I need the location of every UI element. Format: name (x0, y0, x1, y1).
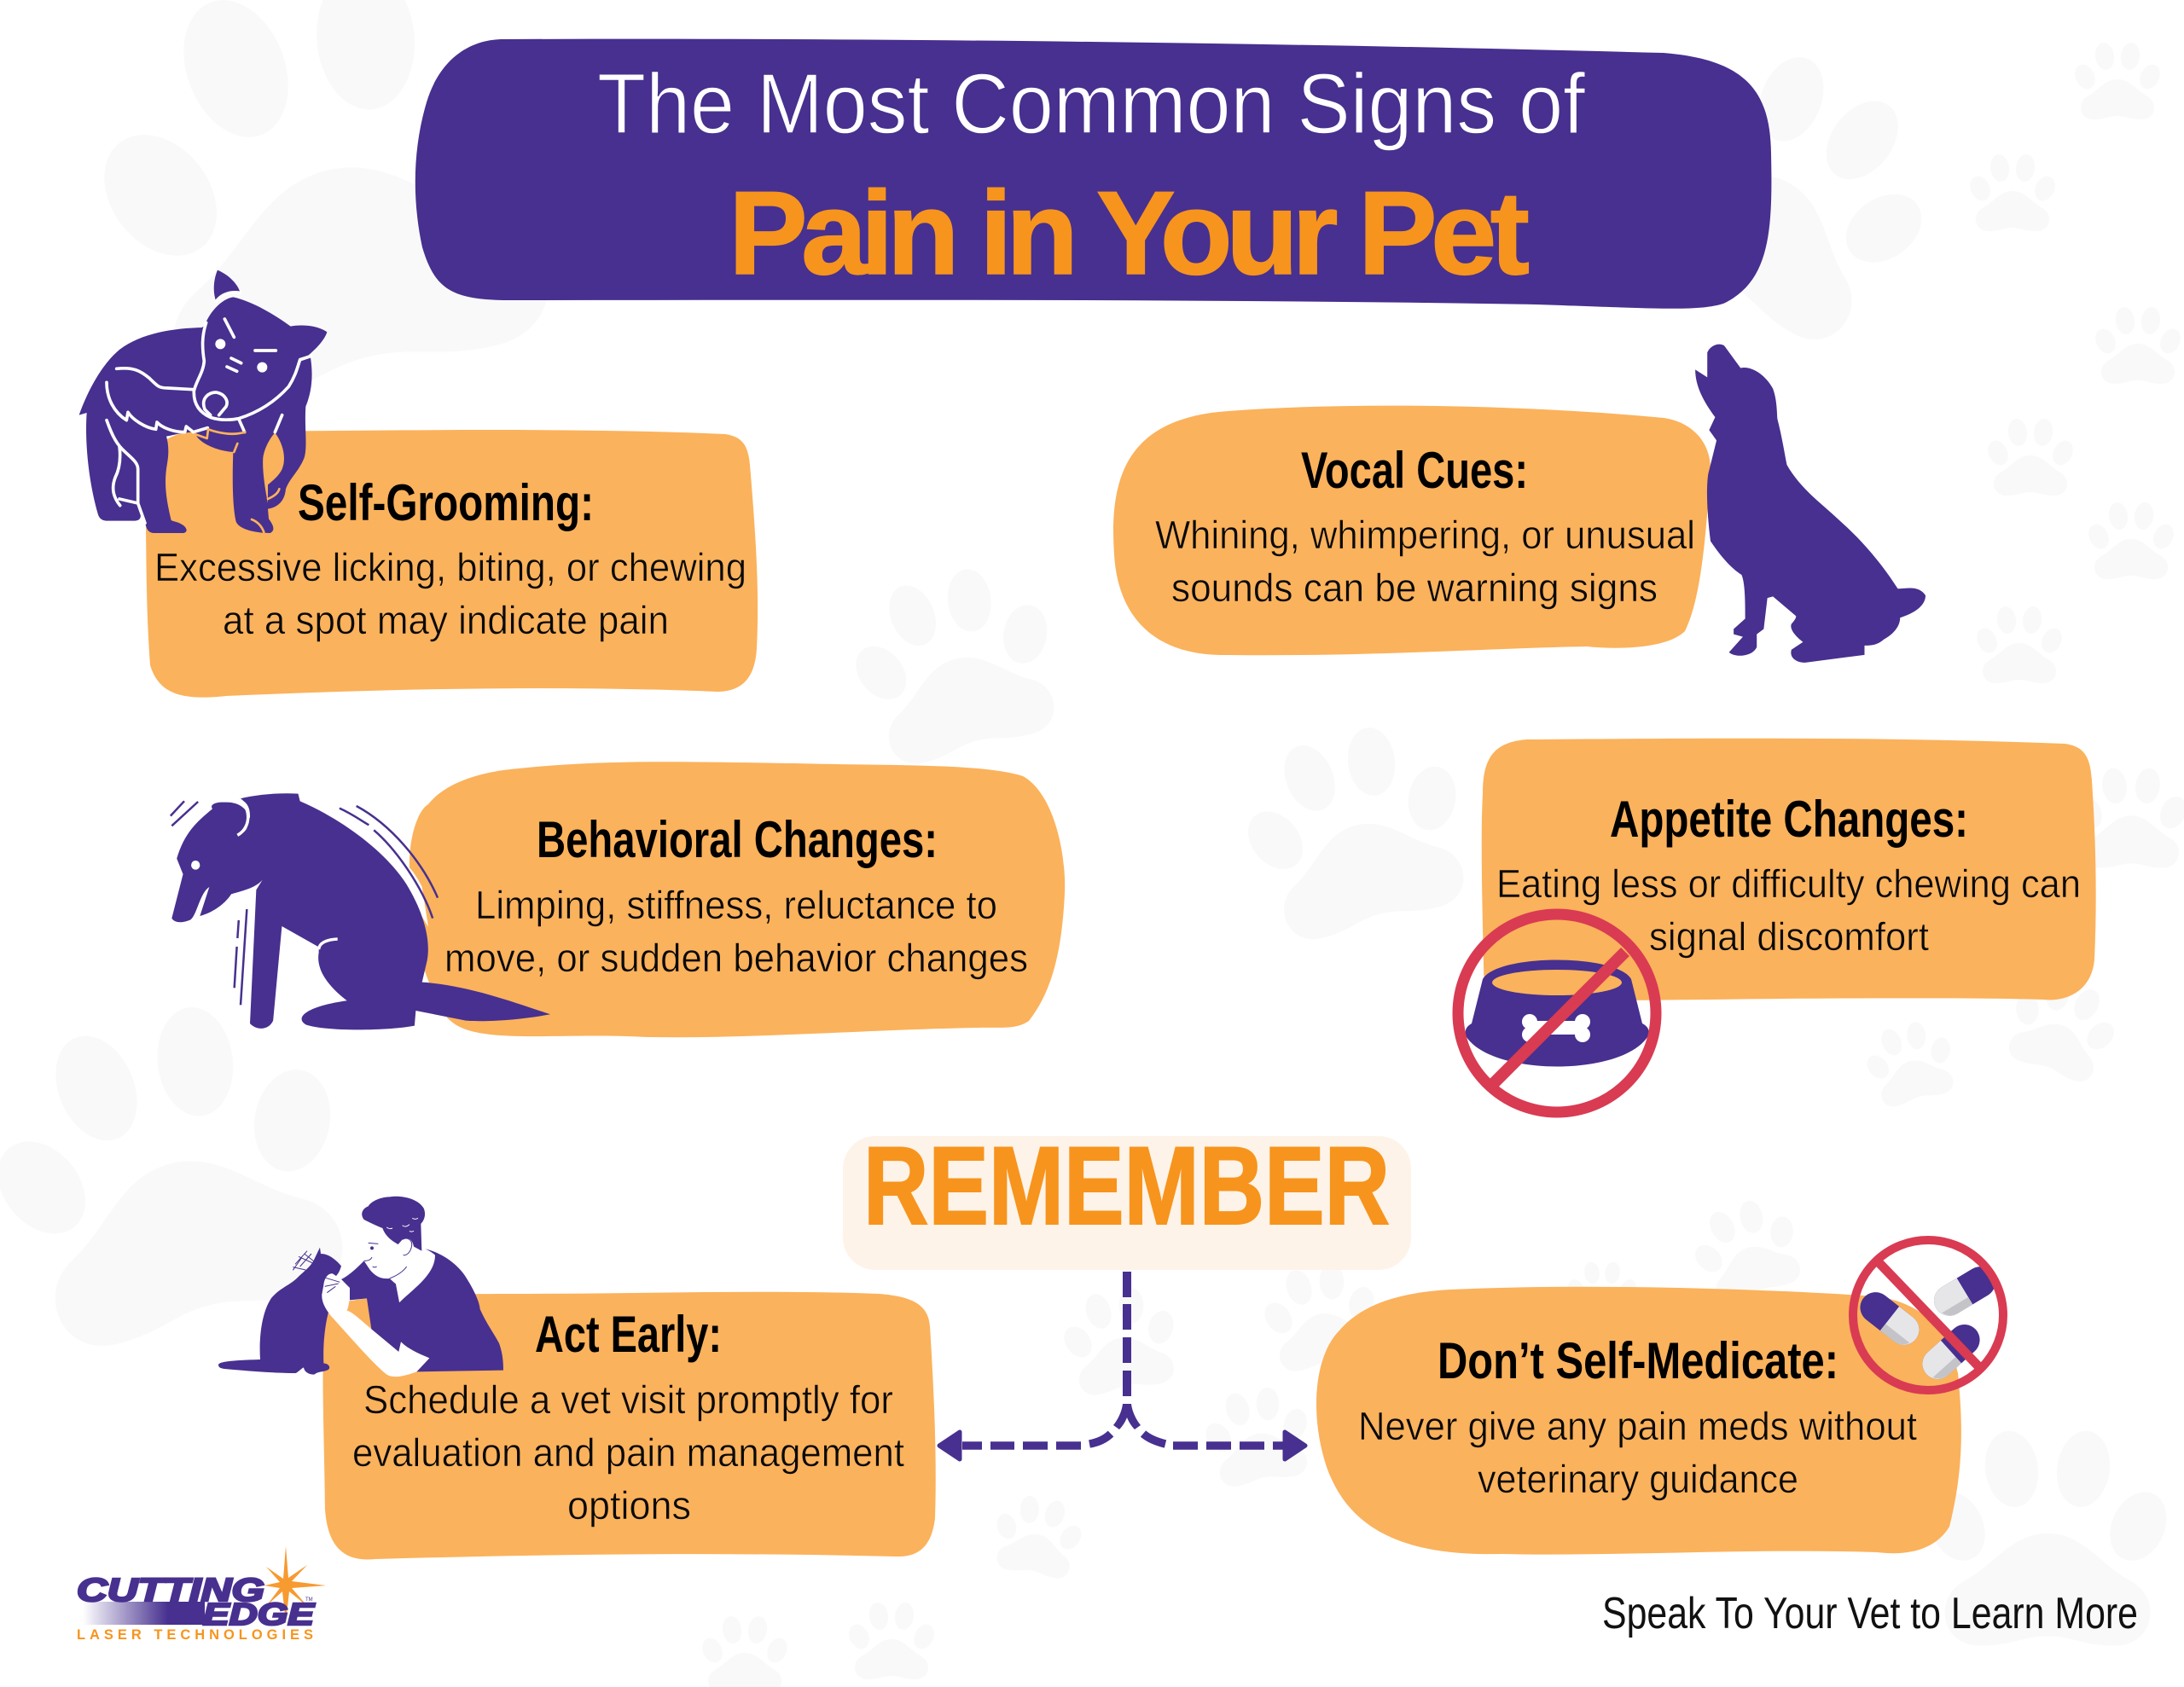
icon: howling dog (1695, 345, 1926, 663)
panel: act early (323, 1292, 936, 1559)
text: don't self-medicate body (1358, 1404, 1917, 1501)
heading: vocal cues: Vocal Cues: (1301, 442, 1528, 499)
text: vocal cues body: Whining, whimpering, or unusual (1155, 513, 1695, 557)
text: behavioral changes body (444, 883, 1028, 980)
panel: appetite changes (1482, 739, 2096, 1002)
heading: behavioral changes: Behavioral Changes: (537, 811, 938, 868)
heading: appetite changes: Appetite Changes: (1610, 791, 1968, 848)
icon: crossed-out pills (1853, 1240, 2003, 1390)
title banner (415, 39, 1771, 309)
icon: person examining cat (218, 1197, 503, 1377)
text: appetite changes body (1496, 861, 2081, 959)
logo starburst (264, 1546, 326, 1623)
text: self-grooming body: at a spot may indicate pain (223, 598, 669, 642)
text: don't self-medicate body: veterinary guidance (1478, 1457, 1798, 1501)
title line 1: The Most Common Signs of (597, 56, 1585, 152)
text: behavioral changes body: Limping, stiffness, reluctance to (475, 883, 997, 927)
panel: behavioral changes (410, 762, 1065, 1037)
text: act early body: evaluation and pain management (352, 1430, 904, 1475)
text: act early body: options (567, 1483, 691, 1528)
panel: don't self-medicate (1316, 1287, 1961, 1555)
panel: vocal cues (1113, 406, 1711, 655)
text: appetite changes body: signal discomfort (1649, 914, 1929, 959)
text: don't self-medicate body: Never give any pain meds without (1358, 1404, 1917, 1448)
icon: dog licking itself (79, 270, 327, 533)
heading: self-grooming: Self-Grooming: (298, 474, 594, 531)
text: self-grooming body (154, 545, 746, 642)
logo word: edge: EDGE (203, 1597, 315, 1632)
arrow: branching dashed arrows (939, 1272, 1305, 1459)
logo: cutting edge laser technologies (77, 1546, 326, 1643)
heading: act early: Act Early: (535, 1306, 722, 1363)
callout: remember: REMEMBER (863, 1123, 1390, 1248)
logo word: cutting: CUTTING (77, 1573, 264, 1609)
text: behavioral changes body: move, or sudden behavior changes (444, 936, 1028, 980)
text: act early body (352, 1377, 904, 1528)
logo tagline: LASER TECHNOLOGIES (77, 1627, 313, 1643)
text: vocal cues body: sounds can be warning signs (1171, 565, 1658, 610)
text: appetite changes body: Eating less or difficulty chewing can (1496, 861, 2081, 906)
text: act early body: Schedule a vet visit promptly for (363, 1377, 893, 1422)
icon: limping dog (171, 793, 550, 1029)
icon: crossed-out food bowl (1458, 914, 1656, 1112)
panel: self-grooming (145, 430, 758, 698)
text: self-grooming body: Excessive licking, biting, or chewing (154, 545, 746, 589)
title line 2: Pain in Your Pet (729, 167, 1530, 299)
heading: don't self-medicate: Don’t Self-Medicate: (1438, 1332, 1838, 1389)
logo trademark: TM (305, 1597, 313, 1603)
text: vocal cues body (1155, 513, 1695, 610)
